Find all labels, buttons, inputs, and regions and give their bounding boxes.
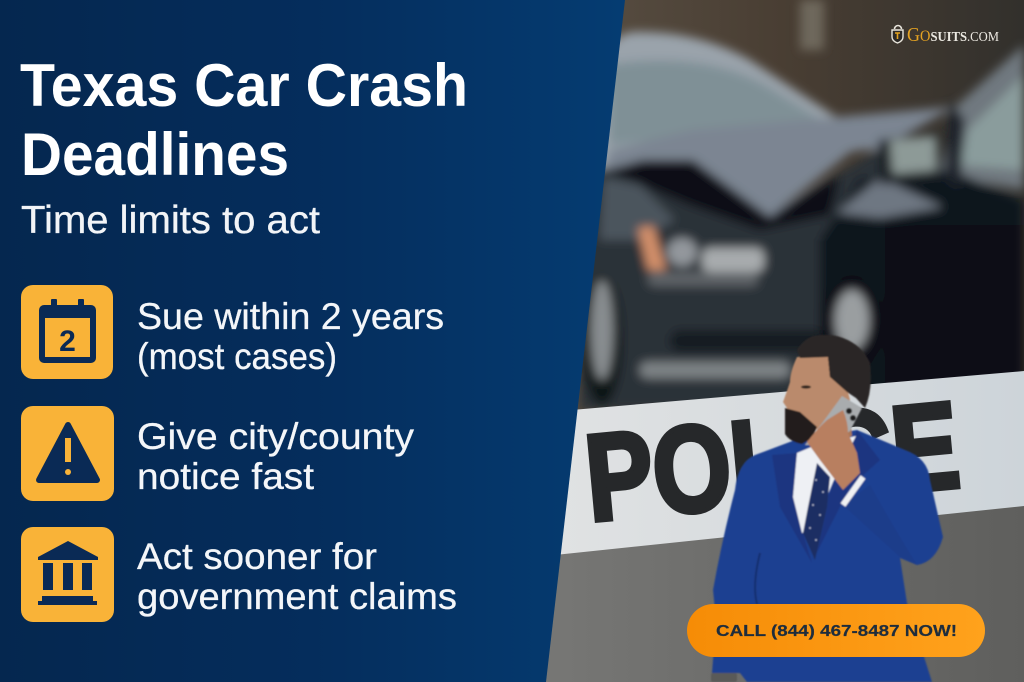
neck (805, 415, 852, 450)
item: sue within 2 years (21, 285, 444, 379)
text: government claims: government claims (137, 576, 457, 617)
phone camera (846, 408, 856, 421)
item: government claims (21, 527, 457, 622)
photo: lawyer on phone (711, 335, 943, 682)
text: give notice: notice fast (137, 456, 315, 497)
hair (797, 335, 871, 408)
left navy panel (0, 0, 625, 682)
title: Texas Car Crash (20, 52, 468, 119)
left lapel (772, 453, 812, 563)
title (20, 52, 468, 188)
icon: padlock (892, 26, 903, 43)
face (783, 357, 850, 432)
subtitle: Time limits to act (21, 199, 320, 242)
call to action button (687, 604, 985, 657)
shirt (793, 436, 856, 533)
watch (711, 673, 737, 682)
icon: warning triangle (21, 406, 114, 501)
text: give notice (137, 416, 415, 497)
left arm inner crease (755, 553, 760, 604)
phone (805, 396, 862, 445)
logo: GoSuits.com: GOSUITS.COM (907, 24, 999, 46)
tie with dots (803, 463, 830, 560)
road surface (540, 490, 1024, 682)
forearm shadow (843, 485, 917, 565)
hand (807, 410, 860, 490)
suit jacket (712, 430, 943, 682)
text: sue within 2 years: (most cases) (137, 336, 337, 377)
text: give notice: Give city/county (137, 416, 415, 457)
photo: blurred crashed cars (540, 0, 1024, 420)
eye (801, 385, 811, 389)
text: government claims (137, 536, 457, 617)
item: give notice (21, 406, 415, 501)
title: Deadlines (21, 121, 289, 188)
icon: calendar (21, 285, 113, 379)
text: sue within 2 years: Sue within 2 years (137, 296, 444, 337)
text: sue within 2 years (137, 296, 444, 377)
text: government claims: Act sooner for (137, 536, 377, 577)
icon: government building (21, 527, 114, 622)
police tape (555, 371, 1024, 555)
icon: calendar: 2 (59, 325, 76, 358)
shirt cuff (843, 477, 863, 505)
call to action button: CALL (844) 467-8487 NOW! (716, 623, 957, 640)
right lapel (813, 430, 880, 560)
beard (785, 408, 817, 444)
